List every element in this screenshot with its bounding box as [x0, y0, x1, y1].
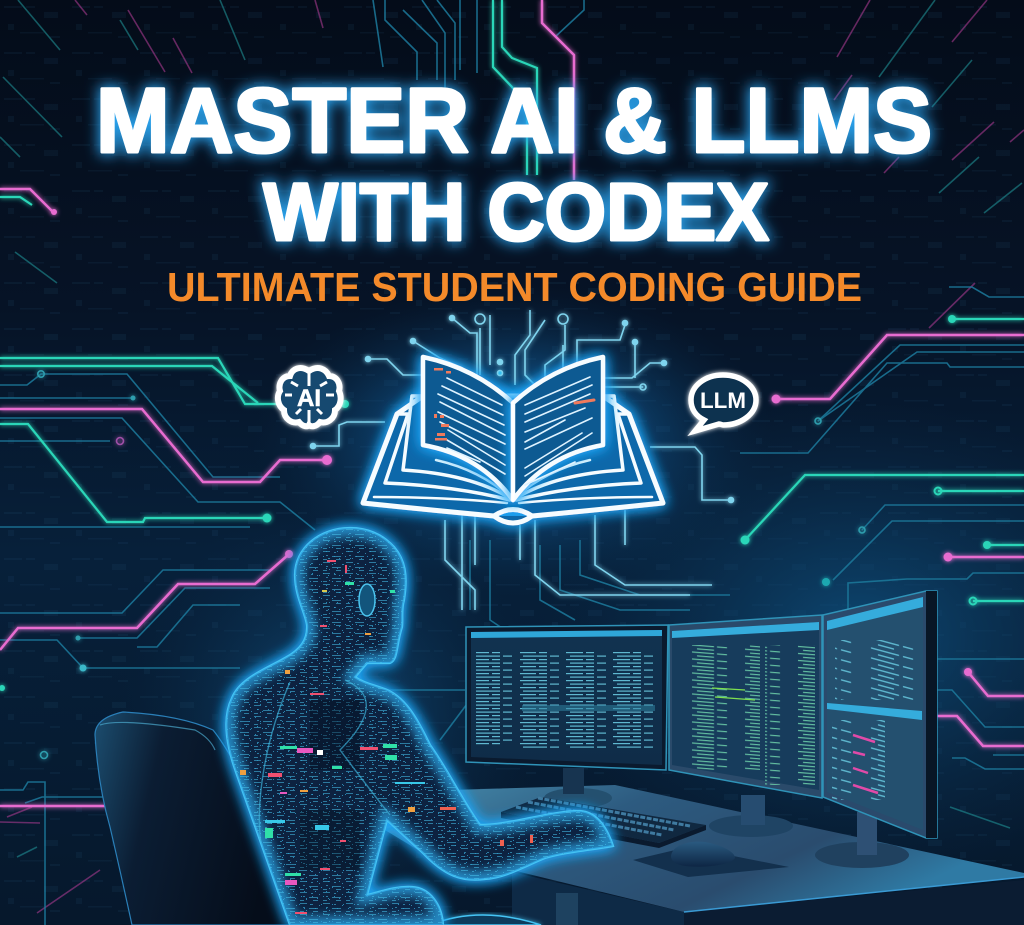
keyboard	[501, 797, 706, 848]
circuit lines: teal traces	[0, 0, 1024, 601]
mouse pad	[633, 847, 789, 877]
circuit node dots	[0, 209, 991, 758]
icon: LLM speech bubble	[691, 375, 756, 431]
body speckle texture	[220, 520, 620, 925]
title glow: WITH CODEX	[263, 167, 769, 258]
body silhouette	[226, 528, 613, 925]
title glow: MASTER AI & LLMS	[96, 70, 932, 172]
desk	[360, 785, 1024, 925]
circuit traces attached to book	[310, 310, 734, 610]
ear	[359, 584, 375, 616]
spine	[512, 403, 514, 500]
icon: AI brain: AI	[297, 385, 321, 412]
monitor 3	[823, 591, 937, 838]
digital human figure	[220, 520, 620, 925]
title glow	[96, 70, 932, 258]
right page code lines	[525, 377, 594, 485]
title line 1: MASTER AI & LLMS	[96, 70, 932, 172]
spine and arm contour lines	[258, 680, 390, 843]
colored code dashes	[240, 560, 533, 914]
monitor stands	[544, 768, 909, 868]
chair	[95, 712, 290, 925]
title line 2: WITH CODEX	[263, 167, 769, 258]
book cover and page stack	[363, 396, 663, 523]
right page	[513, 357, 603, 500]
subtitle: ULTIMATE STUDENT CODING GUIDE	[167, 264, 862, 310]
left page code lines	[438, 378, 505, 474]
monitor 1	[466, 625, 668, 770]
icon: AI brain	[278, 368, 341, 426]
thigh	[430, 915, 541, 925]
icon: LLM speech bubble: LLM	[700, 388, 746, 413]
monitor 2	[669, 615, 822, 798]
open book	[363, 357, 663, 523]
left page coloured tokens	[434, 368, 451, 440]
left page	[423, 357, 513, 500]
mouse	[671, 842, 735, 867]
